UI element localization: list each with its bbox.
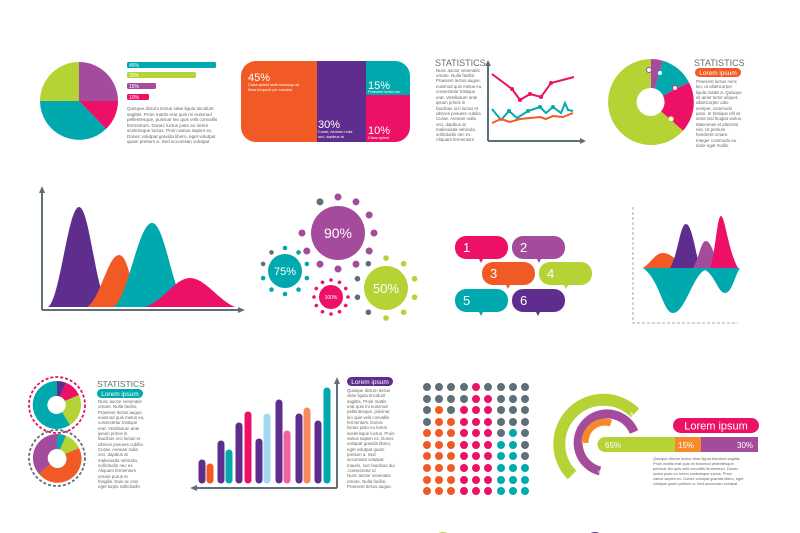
gear 75%	[260, 246, 310, 296]
gear 50%	[354, 255, 418, 321]
panel: dashed donuts statistics	[29, 377, 145, 489]
text block: luctus justo eu lorem	[347, 425, 388, 430]
text block: consectetur tristique	[98, 420, 138, 425]
text block: ornare purus et	[98, 474, 129, 479]
label pill: Lorem ipsum	[101, 391, 139, 398]
text block: luctus justo eu lorem scelerisque luctus. Proin	[653, 471, 732, 476]
text block: Donec volutpat gravida libero, eget volutpat	[127, 134, 216, 139]
panel: numbered speech bubbles	[455, 236, 592, 316]
text block: Aliquam fermentum	[436, 137, 474, 142]
panel: arc gauge with stacked bar	[559, 400, 759, 486]
text block: pellentesque, pulvinar	[347, 409, 390, 414]
text block: orci, dapibus at	[436, 122, 467, 127]
text block: volutpat gravida libero,	[347, 441, 391, 446]
panel: block percentage chart: 10%	[368, 125, 390, 137]
panel: numbered speech bubbles: 5	[463, 293, 470, 308]
gear 75%: 75%	[274, 266, 296, 278]
panel: pie chart with bars	[40, 62, 218, 144]
text block: fermentum. Donec	[347, 420, 384, 425]
panel: wave area chart	[633, 207, 740, 323]
gear 90%	[298, 194, 378, 272]
arc gauges: B	[598, 469, 601, 474]
text block: Aliquam fermentum	[98, 468, 136, 473]
text block: Proin mattis erat quis mi euismod pellentesque,	[653, 461, 735, 466]
panel: gear percentage circles	[260, 194, 418, 321]
text block: euismod quis metus eu,	[98, 415, 144, 420]
text block: Maecenas et placerat	[696, 122, 739, 127]
label pill: Lorem ipsum	[699, 70, 737, 77]
text block: quam pretium a. Sed accumsan volutpat	[127, 139, 210, 144]
text block: malesuada vehicula,	[436, 127, 476, 132]
label pill	[673, 418, 759, 433]
panel: numbered speech bubbles: 3	[490, 266, 497, 281]
text block: Praesent luctus nunc	[696, 79, 738, 84]
gear 100%: 100%	[325, 295, 338, 301]
text block: ligula mattis a. Quisque	[696, 90, 742, 95]
text block: Curae. Aenean nulla	[436, 116, 476, 121]
text block: ultrices posuere cubilia	[98, 442, 143, 447]
text block: sagittis. Proin mattis erat quis mi euismod	[127, 112, 212, 117]
text block: erat. Vestibulum ante	[436, 95, 478, 100]
panel: bell curve area chart	[39, 186, 245, 313]
donut top	[29, 377, 85, 433]
panel: numbered speech bubbles: 6	[520, 293, 527, 308]
text block: eget volutpat quam	[347, 447, 385, 452]
gear 50%: 50%	[373, 281, 399, 296]
text block: pulvinar leo quis velit convallis fermentum. Donec	[653, 466, 738, 471]
panel: grouped bar chart	[190, 377, 395, 491]
text block: sagittis. Proin mattis	[347, 399, 387, 404]
panel: numbered speech bubbles: 1	[463, 240, 470, 255]
text block: ornare. Nulla facilisi.	[347, 479, 387, 484]
donut chart	[608, 59, 694, 145]
text block: Nunc auctor venenatis	[98, 399, 142, 404]
text block: Nunc auctor venenatis	[436, 68, 480, 73]
text block: sit amet tortor aliquet,	[696, 95, 738, 100]
panel: block percentage chart: 30%	[318, 119, 340, 131]
label pill	[347, 377, 393, 386]
text block: Quisque dictum lectus vitae ligula tincidunt	[127, 106, 214, 111]
text block: volutpat quam pretium a. Sed accumsan volutpat	[653, 481, 738, 486]
arc gauges: A	[630, 412, 634, 418]
cut-off bottom circles	[434, 532, 604, 533]
text block: orci, dapibus at	[98, 452, 129, 457]
panel: block percentage chart: Class aptent taciti sociosqu ad	[248, 83, 299, 87]
panel: dot matrix	[423, 383, 529, 495]
text block: amet nisl feugiat varius.	[696, 116, 742, 121]
bar list	[127, 62, 216, 101]
text block: scelerisque luctus. Proin varius sapien ex.	[127, 128, 213, 133]
text block	[127, 106, 218, 144]
bar list: 10%	[129, 95, 140, 101]
text block: mauris, non faucibus dui	[347, 463, 395, 468]
text block: faucibus orci luctus et	[98, 436, 141, 441]
text block: malesuada vehicula,	[98, 458, 138, 463]
text block: hendrerit ornare.	[696, 132, 728, 137]
text block: erat. Vestibulum ante	[98, 426, 140, 431]
text block: accumsan volutpat	[347, 457, 384, 462]
pie chart	[40, 62, 118, 140]
arc gauges	[559, 400, 635, 475]
panel: numbered speech bubbles: 4	[547, 266, 554, 281]
text block: sollicitudin nec ex.	[98, 463, 134, 468]
text block: leo, ut ullamcorper	[696, 84, 733, 89]
heading: STATISTICS	[694, 58, 745, 68]
line chart	[485, 60, 586, 144]
panel: block percentage chart: Curae; Aenean nulla	[318, 130, 353, 134]
text block: Quisque dictum lectus vitae ligula tincidunt sagittis.	[653, 456, 741, 461]
donut bottom	[29, 430, 85, 486]
bar list: 30%	[129, 73, 140, 79]
text block: sollicitudin nec ex.	[436, 132, 472, 137]
text block: varius sapien ex. Donec	[347, 436, 395, 441]
text block: Quisque dictum lectus	[347, 388, 391, 393]
text block: Curae. Aenean nulla	[98, 447, 138, 452]
text block	[695, 79, 742, 148]
panel: numbered speech bubbles: 2	[520, 240, 527, 255]
bar list: 45%	[129, 63, 140, 69]
text block	[98, 399, 144, 489]
text block	[436, 68, 482, 142]
arc gauges: C	[582, 441, 585, 445]
text block: semper, commodo	[696, 106, 733, 111]
panel: block percentage chart: Class aptent	[368, 136, 390, 140]
stacked percentage bar	[598, 437, 758, 452]
text block: Praesent lectus augue,	[98, 410, 143, 415]
text block: eget turpis sollicitudin	[98, 484, 141, 489]
text block	[347, 388, 395, 489]
text block: euismod quis metus eu,	[436, 84, 482, 89]
text block: justo. In tristique elit sit	[695, 111, 741, 116]
text block	[653, 456, 744, 486]
text block: dolor eget mollis.	[696, 143, 729, 148]
panel: block percentage chart: litora torquent per conubia	[248, 88, 293, 92]
bar list: 15%	[129, 84, 140, 90]
stacked percentage bar: 30%	[737, 441, 753, 450]
text block: Nunc auctor venenatis	[347, 473, 391, 478]
panel: block percentage chart: Praesent luctus leo.	[368, 90, 401, 94]
gear 90%: 90%	[324, 225, 352, 241]
text block: nisl. Ut pretium	[696, 127, 726, 132]
label pill: Lorem ipsum	[351, 379, 389, 386]
text block: varius sapien ex. Donec volutpat gravida libero, eget	[653, 476, 744, 481]
panel: block percentage chart: 45%	[248, 72, 270, 84]
text block: leo quis velit convallis	[347, 415, 390, 420]
stacked percentage bar: 65%	[605, 441, 621, 450]
text block: fringilla. Duis ac erat	[98, 479, 139, 484]
text block: ornare. Nulla facilisi.	[436, 73, 476, 78]
text block: erat quis mi euismod	[347, 404, 388, 409]
text block: ornare. Nulla facilisi.	[98, 404, 138, 409]
text block: ullamcorper odio	[696, 100, 729, 105]
stacked percentage bar: 15%	[678, 441, 694, 450]
panel: block percentage chart: 15%	[368, 80, 390, 92]
panel: donut statistics	[608, 58, 745, 148]
text block: fermentum. Donec luctus justo eu lorem	[127, 123, 208, 128]
panel: block percentage chart	[241, 61, 410, 142]
text block: Praesent lectus augue.	[347, 484, 392, 489]
text block: vitae ligula tincidunt	[347, 393, 386, 398]
text block: pellentesque, pulvinar leo quis velit convallis	[127, 117, 218, 122]
text block: ipsum primis in	[98, 431, 128, 436]
panel: block percentage chart: orci, dapibus at	[318, 135, 345, 139]
text block: consectetur tristique	[436, 89, 476, 94]
text block: scelerisque luctus. Proin	[347, 431, 395, 436]
gear 100%	[312, 278, 350, 316]
panel: line chart statistics	[435, 58, 586, 144]
label pill: Lorem ipsum	[684, 420, 748, 432]
heading: STATISTICS	[97, 379, 145, 389]
text block: pretium a. Sed	[347, 452, 376, 457]
text block: Integer commodo eu	[696, 138, 737, 143]
text block: ipsum primis in	[436, 100, 466, 105]
text block: .consectetur id	[347, 468, 376, 473]
text block: Praesent lectus augue,	[436, 78, 481, 83]
text block: ultrices posuere cubilia	[436, 111, 481, 116]
text block: faucibus orci luctus et	[436, 106, 479, 111]
heading: STATISTICS	[435, 58, 486, 68]
